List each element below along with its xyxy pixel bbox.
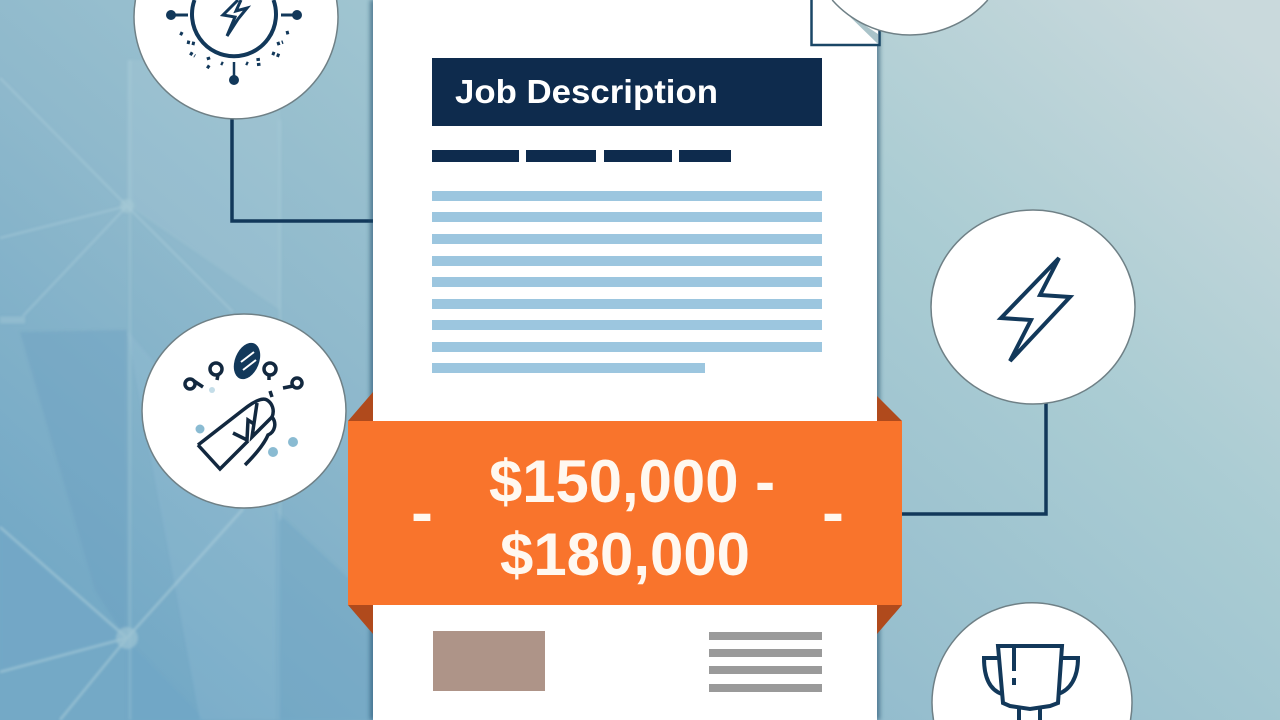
job description header: Job Description bbox=[455, 73, 718, 110]
blue body text lines bbox=[432, 191, 822, 373]
icon: gauge with lightning bbox=[166, 0, 302, 84]
ribbon folds bbox=[348, 392, 902, 634]
circle: top right cropped bbox=[832, 0, 988, 35]
salary ribbon bbox=[348, 392, 902, 634]
circle: left hand and droplets icon bbox=[142, 314, 346, 508]
circle: top left gauge icon bbox=[134, 0, 338, 119]
salary figures: $150,000 - bbox=[489, 448, 775, 515]
icon: lightning bolt bbox=[1001, 258, 1070, 361]
salary figures bbox=[411, 448, 844, 588]
circle: right lightning icon bbox=[931, 210, 1135, 404]
salary figures: - bbox=[411, 479, 433, 546]
connector: top left circle to document bbox=[232, 110, 376, 221]
dark subtitle bars bbox=[432, 150, 731, 162]
connector: right circle to ribbon bbox=[900, 400, 1046, 514]
icon: pointing hand with drops bbox=[185, 363, 302, 469]
salary figures: $180,000 bbox=[500, 521, 750, 588]
salary figures: - bbox=[822, 479, 844, 546]
icon: trophy bbox=[984, 646, 1078, 720]
gray text lines bbox=[709, 632, 822, 692]
document panel bbox=[370, 0, 880, 720]
job description header bbox=[432, 58, 822, 126]
circle: bottom right trophy icon bbox=[932, 603, 1132, 720]
brown image placeholder bbox=[433, 631, 545, 691]
folded page corner bbox=[812, 0, 880, 45]
